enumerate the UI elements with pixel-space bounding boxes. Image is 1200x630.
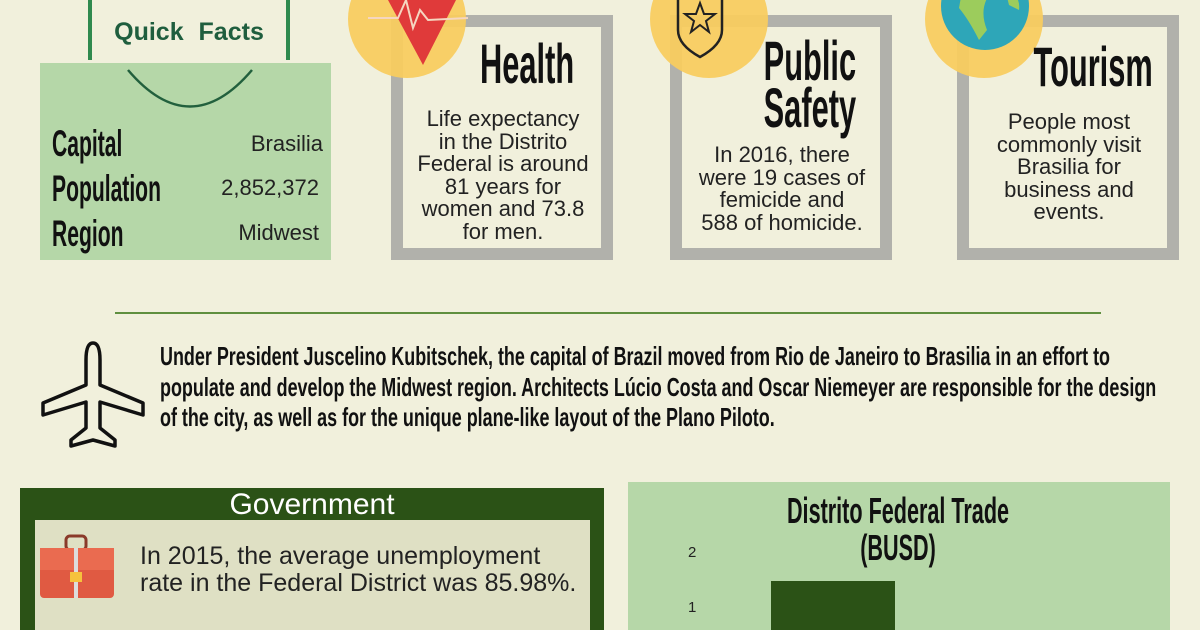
- health text: 81 years for: [445, 174, 561, 198]
- quick facts header box: [88, 0, 290, 60]
- facts rows: Midwest: [238, 220, 319, 245]
- health text: Federal is around: [417, 151, 589, 176]
- unemployment text: In 2015, the average unemployment: [140, 542, 540, 570]
- facts rows: [52, 123, 323, 254]
- facts rows: Region: [52, 213, 123, 254]
- public safety panel: [650, 0, 892, 260]
- unemployment text: [140, 542, 576, 597]
- history paragraph: [160, 341, 1156, 432]
- tourism title: Tourism: [1034, 35, 1153, 98]
- facts rows: Population: [52, 168, 161, 209]
- government panel: [20, 488, 604, 630]
- chart title: [787, 490, 1009, 568]
- public safety title: Safety: [764, 76, 856, 139]
- facts rows: Capital: [52, 123, 122, 164]
- icon: plane: [41, 341, 145, 448]
- health panel: [348, 0, 613, 260]
- public safety title: [764, 29, 856, 139]
- chart title: (BUSD): [860, 527, 936, 568]
- tourism text: People most: [1008, 109, 1130, 134]
- health title: Health: [480, 32, 574, 95]
- tourism text: commonly visit: [997, 132, 1141, 156]
- arc decoration: [127, 69, 253, 108]
- trade chart panel: [628, 482, 1170, 630]
- bar: [771, 581, 895, 630]
- icon: briefcase: [40, 534, 114, 598]
- public safety title: Public: [764, 29, 856, 92]
- icon: shield star: [650, 0, 768, 78]
- public safety text: [698, 142, 866, 234]
- facts rows: Brasilia: [251, 131, 323, 156]
- health text: [417, 106, 589, 244]
- tourism panel: [925, 0, 1179, 260]
- tourism text: Brasilia for: [1017, 154, 1121, 179]
- quick facts panel: [40, 63, 331, 260]
- health text: in the Distrito: [439, 128, 567, 154]
- tourism text: [997, 109, 1141, 224]
- history paragraph: Under President Juscelino Kubitschek, the capital of Brazil moved from Rio de Janeiro to Brasilia in an effort to: [160, 341, 1110, 371]
- health text: women and 73.8: [422, 196, 584, 221]
- icon: heart: [348, 0, 466, 78]
- public safety text: In 2016, there: [714, 142, 850, 167]
- health text: Life expectancy: [427, 106, 579, 131]
- public safety text: femicide and: [720, 187, 844, 212]
- facts rows: 2,852,372: [221, 175, 319, 200]
- tourism text: events.: [1034, 199, 1104, 224]
- chart title: Distrito Federal Trade: [787, 490, 1009, 531]
- icon: globe: [925, 0, 1043, 78]
- trade chart panel: 1: [688, 599, 696, 616]
- history paragraph: populate and develop the Midwest region. Architects Lúcio Costa and Oscar Niemeyer are responsible for the design: [160, 372, 1156, 402]
- public safety text: 588 of homicide.: [701, 210, 863, 234]
- health text: for men.: [463, 218, 543, 244]
- unemployment text: rate in the Federal District was 85.98%.: [140, 569, 576, 597]
- public safety text: were 19 cases of: [699, 164, 865, 190]
- quick facts title: Quick Facts: [114, 18, 264, 46]
- axis labels: 2: [688, 544, 696, 561]
- history paragraph: of the city, as well as for the unique plane-like layout of the Plano Piloto.: [160, 402, 775, 432]
- tourism text: business and: [1004, 176, 1134, 202]
- government heading: Government: [229, 488, 395, 521]
